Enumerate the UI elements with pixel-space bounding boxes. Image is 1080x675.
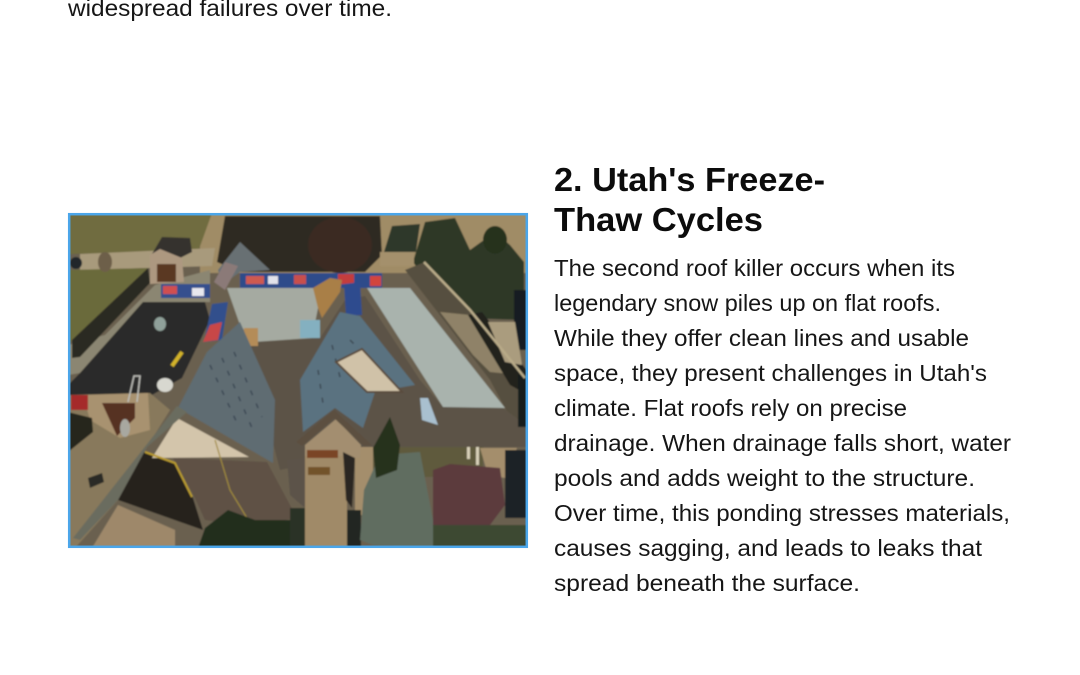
dark trim on right [518, 376, 526, 428]
yellow drip edge [145, 452, 192, 497]
stone entrance gable [304, 419, 374, 546]
background hill and lawn [68, 213, 530, 375]
strip and tan ground on the right of the roof [405, 262, 526, 418]
cream plywood gable, lower left [152, 418, 249, 458]
ladder [128, 376, 140, 402]
tarp pallets, red and blue [161, 262, 382, 342]
left house wall and garage door [68, 393, 150, 488]
driveway and ground [68, 393, 170, 548]
worker and wrapped bundle on roof [244, 278, 362, 346]
text block: body paragraph: spread beneath the surface. [554, 570, 860, 596]
workers [120, 317, 173, 437]
evergreen and shrubs [360, 417, 528, 548]
text block: body paragraph: The second roof killer occurs when its [554, 255, 955, 281]
heading: 2. Utah's Freeze- [554, 161, 825, 198]
text block: body paragraph: legendary snow piles up on flat roofs. [554, 290, 941, 316]
light underlayment roofs [227, 288, 505, 408]
heading: Thaw Cycles [554, 201, 763, 238]
photo: aerial view of house roof under repair [68, 213, 530, 548]
trees behind the house [217, 216, 528, 350]
right fence rail [424, 262, 525, 378]
yellow hose [172, 352, 182, 366]
text block: body paragraph: drainage. When drainage falls short, water [554, 430, 1011, 456]
rope on roof [215, 440, 250, 523]
blue-gray underlayment, right gable [300, 312, 415, 432]
text block: body paragraph [554, 255, 1011, 596]
text block: body paragraph: climate. Flat roofs rely on precise [554, 395, 907, 421]
cream plywood gable, upper right [336, 349, 402, 392]
text block: body paragraph: Over time, this ponding stresses materials, [554, 500, 1010, 526]
blue-gray underlayment, left gable [178, 322, 275, 463]
fence left [72, 268, 150, 358]
text block: body paragraph: space, they present challenges in Utah's [554, 360, 987, 386]
text block: body paragraph: While they offer clean lines and usable [554, 325, 969, 351]
rear gray gable [218, 242, 270, 278]
dark shingled roof, left wing [68, 302, 210, 395]
photo border [69, 214, 527, 547]
long gray ridge [73, 406, 187, 540]
dark roof and gap left of the entrance [288, 465, 306, 546]
shed [150, 237, 192, 284]
bottom trees left of entrance [198, 510, 291, 546]
shingle marks on underlayment [210, 340, 360, 428]
text block: body paragraph: causes sagging, and leads to leaks that [554, 535, 983, 561]
lower left roofs [92, 452, 297, 548]
pale blue tarp [420, 398, 438, 425]
heading [554, 161, 825, 238]
text block: body paragraph: pools and adds weight to the structure. [554, 465, 975, 491]
brown roof sections, centre and right [240, 296, 526, 470]
